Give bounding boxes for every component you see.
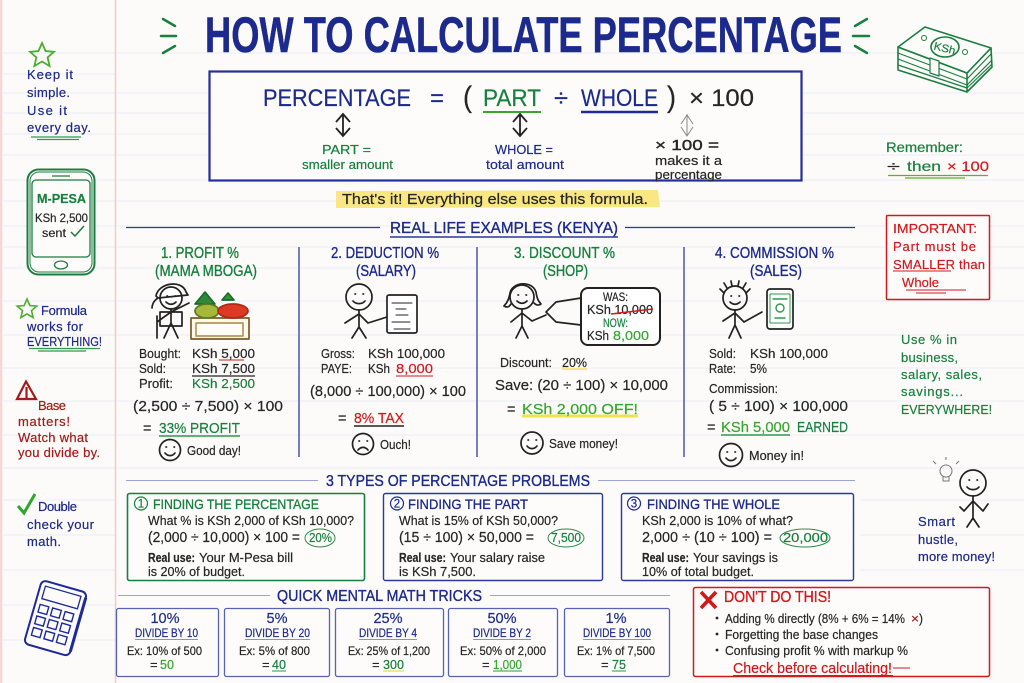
list of mistakes: × xyxy=(911,611,919,626)
heading xyxy=(331,245,439,280)
panel: trick 5 percent: DIVIDE BY 20 xyxy=(245,628,310,640)
sidebar note: keep it simple: every day. xyxy=(27,120,91,135)
question and working xyxy=(399,513,584,547)
result: = xyxy=(143,421,151,437)
panel: example 4 commission xyxy=(707,245,848,466)
discount rate: 20% xyxy=(562,355,587,370)
formula equation: = xyxy=(430,85,444,112)
panel: trick 10 percent: = xyxy=(150,657,158,672)
icon: light bulb xyxy=(933,457,959,481)
sidebar note: base matters xyxy=(17,382,100,460)
panel: trick 25 percent: DIVIDE BY 4 xyxy=(359,628,418,640)
formula equation: ÷ xyxy=(554,85,568,112)
bought sold profit figures: KSh 5,000 xyxy=(192,346,255,361)
gross and paye figures: PAYE: xyxy=(321,361,352,376)
real use: Your salary raise xyxy=(450,550,545,565)
formula equation: PART xyxy=(483,85,541,112)
list of mistakes: ) xyxy=(919,611,923,626)
label: part: smaller amount xyxy=(302,157,393,172)
formula equation: × 100 xyxy=(689,85,754,112)
smiley: money in: Money in! xyxy=(749,448,804,463)
sidebar note: keep it simple: Use it xyxy=(27,103,67,118)
sidebar note: keep it simple xyxy=(27,43,91,140)
result: = xyxy=(338,411,346,427)
heading xyxy=(715,245,834,280)
arrow: part to whole xyxy=(513,114,527,136)
sidebar note: double check xyxy=(18,494,95,549)
icon: red cross xyxy=(701,592,716,608)
label: part xyxy=(302,142,393,172)
label: times 100 xyxy=(655,137,723,182)
real use xyxy=(399,550,545,579)
arrow: times 100 xyxy=(681,114,693,136)
sidebar note: formula works xyxy=(17,299,102,351)
sold and rate figures: Sold: xyxy=(709,346,736,361)
real use: is 20% of budget. xyxy=(148,564,245,579)
panel: trick 50 percent: DIVIDE BY 2 xyxy=(473,628,531,640)
illustration: smart hustle figure: more money! xyxy=(918,549,995,564)
panel: finding the percentage xyxy=(128,494,364,580)
icon: green star xyxy=(30,43,54,66)
panel: example 1 profit xyxy=(133,245,283,460)
heading: 3 xyxy=(631,498,637,510)
heading: (MAMA MBOGA) xyxy=(155,263,257,280)
result: 8% TAX xyxy=(354,411,404,427)
panel: trick 1 percent: 1% xyxy=(606,611,627,627)
panel: trick 10 percent: DIVIDE BY 10 xyxy=(135,628,198,640)
real use xyxy=(148,550,293,579)
sold and rate figures: KSh 100,000 xyxy=(750,346,828,361)
question and working: What is 15% of KSh 50,000? xyxy=(399,513,558,528)
panel: trick 1 percent: DIVIDE BY 100 xyxy=(583,628,651,640)
sidebar note: keep it simple: Keep it xyxy=(27,67,73,82)
list of mistakes xyxy=(716,611,923,658)
question and working: KSh 2,000 is 10% of what? xyxy=(642,513,793,528)
panel: trick 25 percent: = xyxy=(372,657,380,672)
panel: trick 5 percent: = xyxy=(262,657,270,672)
heading: (SALARY) xyxy=(356,263,416,280)
panel: trick 10 percent: Ex: 10% of 500 xyxy=(127,644,202,658)
panel: trick 10 percent xyxy=(116,608,218,676)
bought sold profit figures: Sold: xyxy=(139,361,166,376)
note: remember order: × 100 xyxy=(947,158,989,174)
gross and paye figures: KSh xyxy=(368,361,390,376)
sold and rate figures: Rate: xyxy=(709,361,736,376)
heading: 2 xyxy=(394,498,400,510)
label: whole: WHOLE = xyxy=(495,142,553,157)
calculation: (8,000 ÷ 100,000) × 100 xyxy=(310,384,466,400)
list of mistakes: Forgetting the base changes xyxy=(725,627,878,642)
panel: formula box xyxy=(210,72,802,182)
panel: trick 10 percent: 10% xyxy=(150,611,180,627)
real use: 10% of total budget. xyxy=(642,564,754,579)
result: EARNED xyxy=(797,420,848,436)
icon: calculator xyxy=(24,580,87,656)
icon: m-pesa phone: sent xyxy=(42,226,67,240)
price tag text: WAS: xyxy=(603,292,628,304)
result: 33% PROFIT xyxy=(159,421,240,437)
panel: trick 1 percent xyxy=(564,608,670,676)
highlighted note: That's it! Everything else uses this formula. xyxy=(342,191,648,208)
panel: trick 50 percent: = xyxy=(482,657,490,672)
smiley: good day xyxy=(160,440,241,460)
gross and paye figures xyxy=(321,346,445,376)
note: remember order: then xyxy=(907,158,941,174)
panel: don't do this xyxy=(694,588,990,677)
panel: trick 50 percent: 1,000 xyxy=(493,657,522,672)
real use: is KSh 7,500. xyxy=(399,564,476,579)
calculation: (2,500 ÷ 7,500) × 100 xyxy=(133,399,283,415)
price tag text: KSh 10,000 xyxy=(587,302,653,317)
real use xyxy=(642,550,778,579)
question and working xyxy=(642,513,830,547)
note: use percent everywhere: Use % in xyxy=(901,332,957,347)
price tag text: 8,000 xyxy=(613,328,649,343)
smiley: save money: Save money! xyxy=(549,436,618,451)
real use: Your M-Pesa bill xyxy=(199,550,293,565)
result: = xyxy=(507,402,515,418)
bought sold profit figures: KSh 7,500 xyxy=(192,361,255,376)
formula equation xyxy=(263,81,754,114)
note: use percent everywhere: savings... xyxy=(901,384,963,399)
icon: stack of money: KSh xyxy=(932,40,957,57)
sidebar note: base matters: Watch what xyxy=(18,430,88,445)
bought sold profit figures xyxy=(139,346,255,391)
panel: trick 25 percent xyxy=(336,608,444,676)
panel: trick 25 percent: 300 xyxy=(383,657,404,672)
list of mistakes: Adding % directly (8% + 6% = 14% xyxy=(725,611,905,626)
label: times 100: makes it a xyxy=(655,153,723,168)
callout: important: Whole xyxy=(902,275,939,290)
callout: important xyxy=(886,216,990,300)
bought sold profit figures: Profit: xyxy=(139,376,173,391)
bought sold profit figures: Bought: xyxy=(139,346,181,361)
sold and rate figures: Commission: xyxy=(709,381,778,396)
icon: green star xyxy=(17,299,37,318)
note: use percent everywhere: EVERYWHERE! xyxy=(901,402,992,417)
result xyxy=(707,420,848,436)
illustration: person with phone xyxy=(720,281,793,338)
price tag text: KSh xyxy=(587,328,609,343)
arrow: percentage to part xyxy=(336,114,350,136)
heading: FINDING THE PERCENTAGE xyxy=(153,496,319,512)
real use: Real use: xyxy=(642,550,689,565)
formula equation: PERCENTAGE xyxy=(263,85,411,112)
note: remember order: Remember: xyxy=(886,139,963,155)
real use: Real use: xyxy=(399,550,446,565)
question and working xyxy=(148,513,354,547)
sidebar note: base matters: Base xyxy=(38,398,66,413)
note: remember order: ÷ xyxy=(887,158,901,174)
illustration: smart hustle figure xyxy=(918,457,995,564)
sold and rate figures: 5% xyxy=(750,361,767,376)
sidebar note: double check: math. xyxy=(27,534,61,549)
question and working: What % is KSh 2,000 of KSh 10,000? xyxy=(148,513,354,528)
panel: trick 1 percent: 75 xyxy=(612,657,626,672)
panel: trick 25 percent: 25% xyxy=(373,611,403,627)
sidebar note: formula works: works for xyxy=(26,319,84,334)
icon: green check xyxy=(18,494,35,513)
heading: 2. DEDUCTION % xyxy=(331,245,439,262)
question and working: 2,000 ÷ (10 ÷ 100) = xyxy=(642,530,772,546)
sidebar note: base matters: matters! xyxy=(18,414,70,429)
heading: FINDING THE PART xyxy=(408,496,528,512)
panel: trick 5 percent: Ex: 5% of 800 xyxy=(239,644,310,658)
panel: trick 5 percent: 40 xyxy=(272,657,286,672)
panel: finding the part xyxy=(384,494,602,580)
callout: important: IMPORTANT: xyxy=(893,221,977,236)
heading: quick mental math tricks: QUICK MENTAL MATH TRICKS xyxy=(277,588,482,605)
icon: warning triangle xyxy=(17,382,36,399)
question and working: (15 ÷ 100) × 50,000 = xyxy=(399,530,534,546)
panel: trick 1 percent: Ex: 1% of 7,500 xyxy=(577,644,655,658)
heading: (SALES) xyxy=(750,263,802,280)
note: use percent everywhere: business, xyxy=(901,350,958,365)
panel: example 2 deduction xyxy=(310,245,466,454)
heading: 4. COMMISSION % xyxy=(715,245,834,262)
result: = xyxy=(707,420,715,436)
smiley: save money xyxy=(521,432,618,454)
panel: trick 5 percent: 5% xyxy=(267,611,288,627)
sold and rate figures xyxy=(709,346,828,396)
real use: Your savings is xyxy=(693,550,778,565)
illustration: person with payslip xyxy=(345,284,417,338)
list of mistakes: Confusing profit % with markup % xyxy=(725,643,908,658)
note: use percent everywhere: salary, sales, xyxy=(901,367,982,382)
heading: 1 xyxy=(138,498,144,510)
sidebar note: keep it simple: simple. xyxy=(27,85,70,100)
panel: finding the whole xyxy=(622,494,854,580)
result: KSh 2,000 OFF! xyxy=(522,402,638,418)
smiley: money in xyxy=(720,444,804,466)
illustration: mama mboga stall xyxy=(152,284,249,339)
callout: important: SMALLER than xyxy=(893,257,985,272)
formula equation: ( xyxy=(463,81,472,114)
calculation: Save: (20 ÷ 100) × 10,000 xyxy=(495,378,668,394)
price tag text xyxy=(587,292,653,343)
heading: DON'T DO THIS! xyxy=(724,589,831,606)
sad face: ouch xyxy=(352,434,411,454)
question and working: 20,000 xyxy=(783,530,828,545)
question and working: 20% xyxy=(309,530,332,545)
illustration: smart hustle figure: hustle, xyxy=(918,532,958,547)
warning note: Check before calculating! xyxy=(733,661,892,677)
sidebar note: base matters: you divide by. xyxy=(18,445,100,460)
panel: trick 1 percent: = xyxy=(601,657,609,672)
heading: (SHOP) xyxy=(543,263,588,280)
icon: stack of money xyxy=(898,27,992,92)
gross and paye figures: 8,000 xyxy=(396,361,433,376)
note: remember order xyxy=(886,139,989,178)
panel: example 3 discount xyxy=(495,245,668,454)
heading: 1. PROFIT % xyxy=(161,245,239,262)
discount rate xyxy=(500,355,587,370)
label: times 100: percentage xyxy=(655,167,722,182)
heading: 3. DISCOUNT % xyxy=(514,245,615,262)
sad face: ouch: Ouch! xyxy=(380,437,411,452)
result: KSh 5,000 xyxy=(721,420,790,436)
gross and paye figures: Gross: xyxy=(321,346,355,361)
question and working: 7,500 xyxy=(551,530,581,545)
heading xyxy=(155,245,257,280)
label: part: PART = xyxy=(322,142,371,157)
panel: trick 10 percent: 50 xyxy=(160,657,174,672)
price tag text: NOW: xyxy=(603,318,628,330)
callout: important: Part must be xyxy=(893,239,976,254)
label: times 100: × 100 = xyxy=(655,137,719,154)
icon: m-pesa phone: KSh 2,500 xyxy=(35,211,88,225)
illustration: smart hustle figure: Smart xyxy=(918,514,955,529)
question and working: (2,000 ÷ 10,000) × 100 = xyxy=(148,530,300,546)
formula equation: WHOLE xyxy=(581,85,658,112)
sidebar note: double check: Double xyxy=(38,499,77,514)
panel: trick 50 percent: Ex: 50% of 2,000 xyxy=(460,644,546,658)
note: use percent everywhere xyxy=(901,332,992,417)
smiley: good day: Good day! xyxy=(187,443,241,458)
icon: m-pesa phone xyxy=(28,170,94,274)
heading xyxy=(514,245,615,280)
bought sold profit figures: KSh 2,500 xyxy=(192,376,255,391)
label: whole xyxy=(486,142,564,172)
calculation: ( 5 ÷ 100) × 100,000 xyxy=(709,399,848,415)
gross and paye figures: KSh 100,000 xyxy=(368,346,445,361)
panel: trick 25 percent: Ex: 25% of 1,200 xyxy=(348,644,430,658)
sidebar note: double check: check your xyxy=(27,517,95,532)
heading: FINDING THE WHOLE xyxy=(647,496,780,512)
label: whole: total amount xyxy=(486,157,564,172)
icon: m-pesa phone: M-PESA xyxy=(37,191,87,206)
heading: three types of percentage problems: 3 TYPES OF PERCENTAGE PROBLEMS xyxy=(326,473,590,490)
panel: trick 5 percent xyxy=(224,608,330,676)
discount rate: Discount: xyxy=(500,355,552,370)
sidebar note: formula works: EVERYTHING! xyxy=(27,334,102,349)
formula equation: ) xyxy=(667,81,676,114)
panel: trick 50 percent xyxy=(448,608,558,676)
heading: real life examples: REAL LIFE EXAMPLES (KENYA) xyxy=(390,220,618,237)
panel: trick 50 percent: 50% xyxy=(487,611,517,627)
real use: Real use: xyxy=(148,550,195,565)
illustration: shopper with price tag xyxy=(504,284,660,345)
sidebar note: formula works: Formula xyxy=(41,303,88,318)
